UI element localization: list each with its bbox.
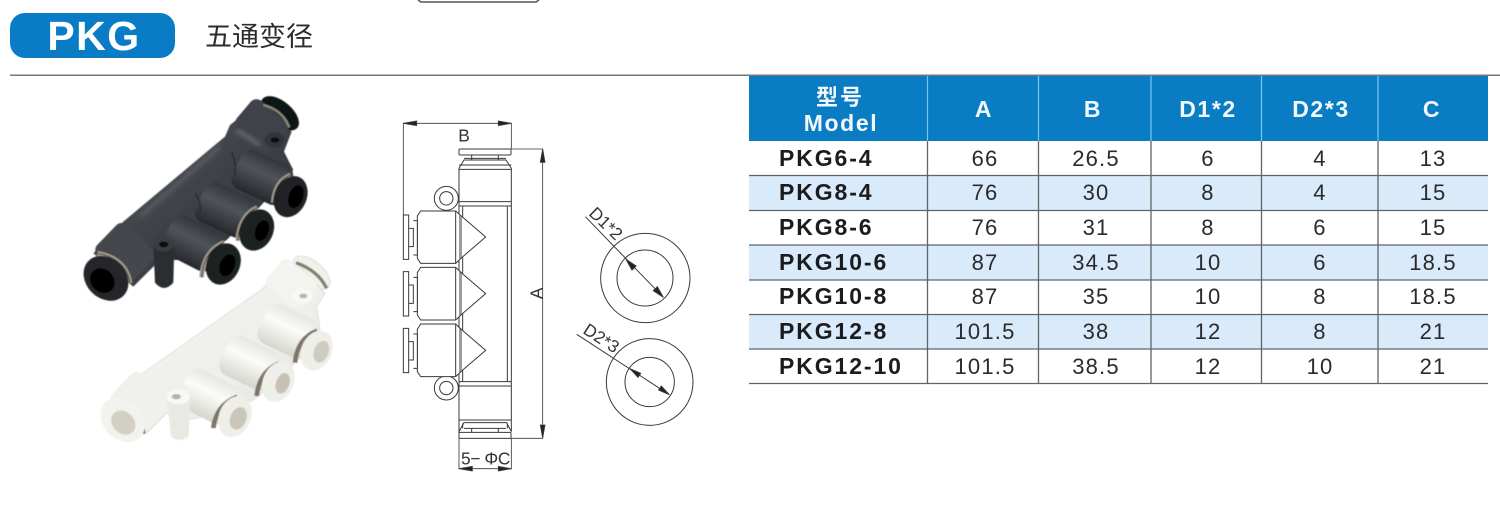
row values: 8 <box>1201 215 1215 240</box>
row values: 101.5 <box>954 354 1016 379</box>
row values: 10 <box>1195 250 1221 275</box>
row values: 101.5 <box>954 319 1016 344</box>
white main body <box>117 265 325 433</box>
model names: PKG8-6 <box>779 214 873 240</box>
model names: PKG8-4 <box>779 179 873 205</box>
white upper ring <box>296 263 327 288</box>
dimension B: B <box>458 125 470 145</box>
table header row <box>749 76 1488 141</box>
black branch middle <box>191 179 281 256</box>
row values: 87 <box>972 284 998 309</box>
table header row: D1*2 <box>1179 96 1237 122</box>
row values: 4 <box>1313 180 1327 205</box>
black branch lower <box>158 212 247 290</box>
model names <box>779 145 903 379</box>
bottom push ring <box>459 423 511 438</box>
row values: 10 <box>1195 284 1221 309</box>
dimension 5-phi C: 5− ΦC <box>461 449 510 469</box>
row values: 34.5 <box>1072 250 1120 275</box>
row values: 87 <box>972 250 998 275</box>
row values: 30 <box>1083 180 1109 205</box>
row values: 6 <box>1313 215 1327 240</box>
row values: 38.5 <box>1072 354 1120 379</box>
row values: 4 <box>1313 146 1327 171</box>
row values: 31 <box>1083 215 1109 240</box>
dimension B <box>403 121 511 215</box>
table header row: A <box>975 96 993 122</box>
model names: PKG12-10 <box>779 353 903 379</box>
table header row: D2*3 <box>1292 96 1350 122</box>
model names: PKG10-6 <box>779 249 888 275</box>
white upper end cap <box>288 250 336 295</box>
row values: 21 <box>1420 319 1446 344</box>
alternating row shading <box>749 176 1488 349</box>
row values: 8 <box>1313 319 1327 344</box>
black upper ring <box>263 105 289 127</box>
port circles: D2 <box>577 319 693 425</box>
white mounting pin <box>166 389 191 440</box>
branch ports <box>403 211 486 377</box>
black upper end cap <box>255 90 305 137</box>
product photo: white fitting <box>92 250 339 451</box>
row values: 10 <box>1307 354 1333 379</box>
white left end <box>92 369 173 451</box>
table header row: B <box>1084 96 1102 122</box>
model names: PKG6-4 <box>779 145 873 171</box>
white upper boss <box>293 289 313 303</box>
row values: 18.5 <box>1409 284 1457 309</box>
dimension A <box>511 149 546 438</box>
port circles: D1: D1*2 <box>585 203 627 244</box>
model names: PKG12-8 <box>779 318 888 344</box>
black highlights and folds <box>140 130 260 217</box>
port circles: D2: D2*3 <box>580 319 623 357</box>
black mounting pin <box>153 237 174 288</box>
row values: 38 <box>1083 319 1109 344</box>
black upper boss <box>264 132 284 148</box>
black main body <box>93 104 293 287</box>
mounting eyes <box>434 186 458 400</box>
table header row: 型号 <box>816 80 864 112</box>
row values: 15 <box>1420 180 1446 205</box>
row values <box>954 146 1457 379</box>
row values: 26.5 <box>1072 146 1120 171</box>
row values: 6 <box>1313 250 1327 275</box>
white branch middle <box>216 332 301 407</box>
white body top cylinder <box>263 256 320 312</box>
row values: 8 <box>1201 180 1215 205</box>
table grid lines <box>749 141 1488 384</box>
row values: 12 <box>1195 319 1221 344</box>
row values: 15 <box>1420 215 1446 240</box>
subtitle: 五通变径 <box>205 15 313 54</box>
row values: 76 <box>972 215 998 240</box>
row values: 8 <box>1313 284 1327 309</box>
row values: 21 <box>1420 354 1446 379</box>
dimension A: A <box>526 287 546 299</box>
technical drawing: side view <box>403 121 546 471</box>
row values: 76 <box>972 180 998 205</box>
table header row: Model <box>804 110 878 136</box>
cropped drawing fragment at top edge <box>418 0 539 2</box>
row values: 18.5 <box>1409 250 1457 275</box>
black left end <box>74 220 158 310</box>
specification table <box>749 76 1488 384</box>
row values: 35 <box>1083 284 1109 309</box>
row values: 66 <box>972 146 998 171</box>
row values: 12 <box>1195 354 1221 379</box>
dimension 5-phi C <box>459 438 511 471</box>
title badge <box>10 13 175 59</box>
white branch upper <box>254 300 339 376</box>
header rule <box>10 74 1500 76</box>
black branch upper <box>228 146 314 223</box>
main body <box>459 160 511 432</box>
row values: 13 <box>1420 146 1446 171</box>
product photo: black fitting <box>74 90 314 310</box>
top push ring <box>459 149 511 160</box>
port circles: D1 <box>585 203 690 323</box>
table header row: C <box>1423 96 1441 122</box>
model names: PKG10-8 <box>779 283 888 309</box>
black body top cylinder <box>232 96 291 154</box>
white branch lower <box>174 365 258 443</box>
row values: 6 <box>1201 146 1215 171</box>
title badge: PKG <box>47 13 141 59</box>
